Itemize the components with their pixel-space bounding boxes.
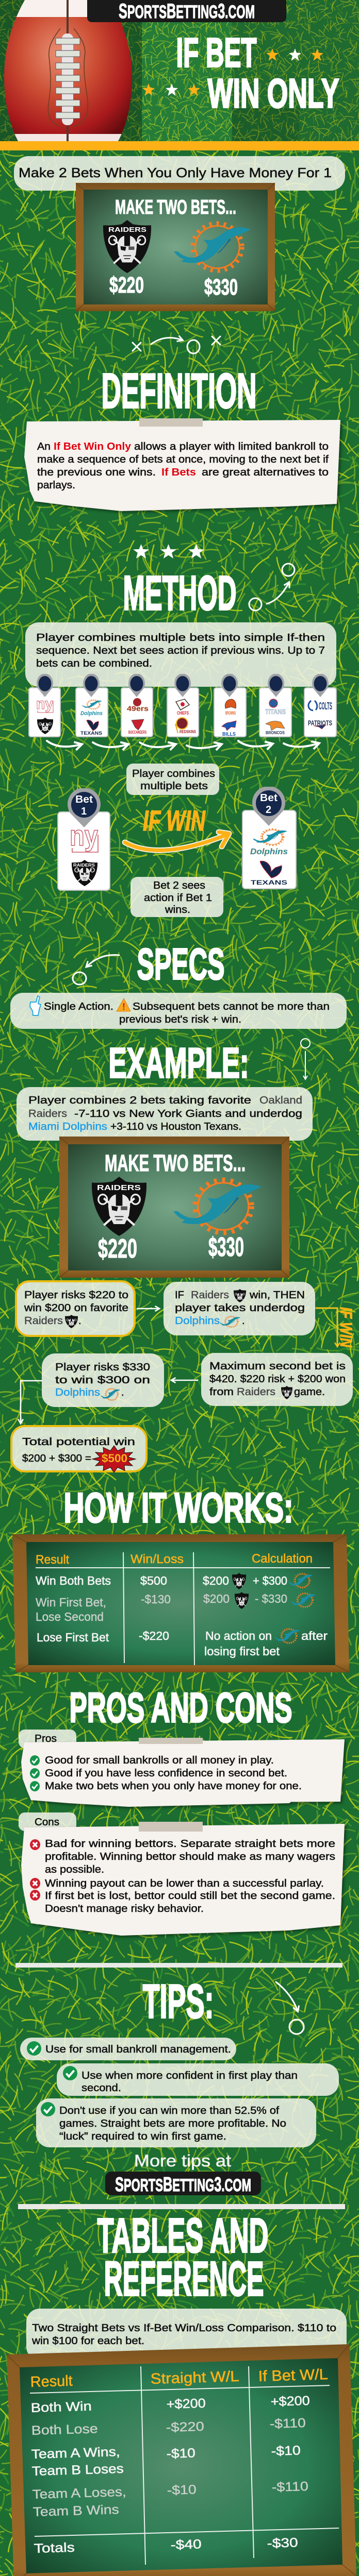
row: win first lose second: -$130 <box>141 1592 171 1606</box>
row: team a wins: Team B Loses <box>31 2462 124 2479</box>
card 5: browns bills: BROWNS <box>225 710 236 716</box>
row: both lose: -$220 <box>166 2419 204 2435</box>
row: both lose: -$110 <box>269 2416 306 2431</box>
callout: maximum second bet: from <box>209 1386 234 1398</box>
table header: Straight W/L <box>150 2368 239 2387</box>
callout: risks 330: . <box>121 1387 124 1398</box>
table header: Win/Loss <box>130 1552 184 1566</box>
icon: football <box>0 0 139 141</box>
cons list: Bad for winning bettors. Separate straight bets more <box>45 1838 335 1850</box>
row: totals: -$40 <box>170 2537 202 2552</box>
row: win first lose second: - $330 <box>255 1592 287 1605</box>
row: both lose <box>31 2416 306 2438</box>
panel: comparison table <box>7 2344 356 2576</box>
panel: bet 2 card: Bet <box>260 792 278 804</box>
panel: chalkboard make two bets <box>76 183 275 311</box>
row: both win <box>30 2394 310 2415</box>
panel: tip 3: games. Straight bets are more profitable. No <box>59 2118 286 2129</box>
definition text: An <box>37 441 51 452</box>
callout: total potential win: $200 + $300 = <box>22 1453 91 1464</box>
callout: risks 220 <box>16 1281 135 1336</box>
card 6: titans broncos <box>259 673 291 737</box>
icon: title stars <box>142 48 323 96</box>
amount: raiders: $220 <box>98 1234 137 1264</box>
panel: bet 2 card: Dolphins <box>250 848 288 856</box>
row: lose first bet: Lose First Bet <box>37 1631 109 1644</box>
callout: maximum second bet: $420. $220 risk + $200 won <box>209 1374 346 1385</box>
panel: bet 1 card: ny <box>70 819 98 852</box>
table header: Calculation <box>252 1552 313 1566</box>
cons list: Doesn't manage risky behavior. <box>45 1903 204 1914</box>
table header: If Bet W/L <box>258 2366 328 2385</box>
title: IF BET <box>176 30 257 75</box>
definition text: parlays. <box>37 480 75 491</box>
cons list: profitable. Winning bettor should make as many wagers <box>45 1851 335 1862</box>
panel: header <box>0 0 339 141</box>
panel: method description: Player combines multiple bets into simple If-then <box>36 632 325 643</box>
table header: Result <box>30 2373 73 2391</box>
panel: bet 2 card: 2 <box>266 804 271 816</box>
panel: comparison description: win $100 for each bet. <box>31 2335 144 2347</box>
card 4: chiefs redskins: CHIEFS <box>177 710 189 716</box>
panel: example description: Raiders <box>28 1108 67 1120</box>
panel: tip 1: Use for small bankroll management. <box>45 2044 231 2055</box>
arrow: if win <box>125 832 229 850</box>
panel: bet 1 card: Bet <box>75 794 93 805</box>
table header <box>36 1552 313 1567</box>
callout: risks 330: to win $300 on <box>55 1375 150 1386</box>
panel: bet 2 card: TEXANS <box>251 879 287 886</box>
panel: comparison description: Two Straight Bets vs If-Bet Win/Loss Comparison. $110 to <box>32 2323 336 2334</box>
panel: chalkboard example <box>59 1137 289 1278</box>
card 6: titans broncos: TITANS <box>265 707 286 716</box>
callout: bet 2 sees action <box>130 877 223 917</box>
panel: bet 1 card: RAIDERS <box>73 863 95 868</box>
definition text: are great alternatives to <box>202 467 329 478</box>
panel: bet 1 card: 1 <box>81 806 87 817</box>
callout: risks 330: Dolphins <box>55 1387 100 1398</box>
band: yellow divider <box>0 141 359 150</box>
panel: tip 3: Don't use if you can win more than 52.5% of <box>59 2105 279 2116</box>
icon: one finger hand <box>30 996 41 1015</box>
row: team a loses: Team B Wins <box>32 2502 119 2519</box>
arrows: between bet cards <box>47 741 318 748</box>
panel: specs rule: Subsequent bets cannot be more than <box>133 1001 330 1012</box>
panel: example description: -7-110 vs New York Giants and underdog <box>74 1108 302 1120</box>
panel: specs rule <box>10 993 347 1029</box>
row: win first lose second <box>36 1592 316 1623</box>
callout: maximum second bet: Maximum second bet is <box>209 1361 346 1372</box>
callout: risks 330 <box>42 1353 164 1407</box>
card 3: 49ers buccaneers: BUCCANEERS <box>128 730 146 735</box>
card 7: colts patriots: PATRIOTS <box>308 719 332 727</box>
row: both win: +$200 <box>270 2394 310 2409</box>
panel: tip 2 <box>57 2063 339 2096</box>
icon: play diagram specs <box>73 955 119 985</box>
row: team a loses: -$10 <box>167 2482 197 2498</box>
row: totals: -$30 <box>267 2535 298 2551</box>
card 3: 49ers buccaneers: 49ers <box>127 704 149 713</box>
definition text: If Bets <box>161 467 196 478</box>
panel: specs rule: Single Action. <box>44 1001 113 1012</box>
label: if win: IF WIN <box>143 804 206 837</box>
arrow: to total <box>21 1381 42 1423</box>
callout: if raiders win: player takes underdog <box>175 1302 305 1314</box>
tab: cons <box>19 1812 76 1831</box>
panel: pros: Pros <box>35 1733 57 1744</box>
panel: example description: Oakland <box>259 1095 302 1106</box>
callout: risks 220: Raiders <box>24 1315 63 1327</box>
icon: warning: ! <box>122 1002 125 1012</box>
cons list <box>30 1838 335 1914</box>
callout: if raiders win: Dolphins <box>175 1315 220 1327</box>
callout: if raiders win: Raiders <box>191 1290 229 1301</box>
pros list <box>30 1755 302 1792</box>
panel: tip 3 <box>36 2098 316 2147</box>
icon: dolphins logo <box>174 224 251 270</box>
callout: bet 2 sees action: action if Bet 1 <box>144 892 212 904</box>
row: win both bets <box>36 1573 313 1589</box>
title <box>176 30 339 116</box>
icon: play diagram method <box>249 564 295 611</box>
cons list: If first bet is lost, bettor could still bet the second game. <box>45 1890 335 1902</box>
card 5: browns bills <box>214 673 246 737</box>
card 3: 49ers buccaneers <box>121 673 153 737</box>
panel: example description: Player combines 2 bets taking favorite <box>28 1095 251 1106</box>
row: lose first bet <box>37 1629 328 1658</box>
row: totals: Totals <box>34 2540 75 2556</box>
row: team a wins: -$10 <box>271 2443 301 2459</box>
row: team a loses: Team A Loses, <box>32 2485 126 2502</box>
icon: play diagram definition <box>133 336 220 353</box>
callout: if raiders win <box>164 1282 315 1335</box>
row: win first lose second: Win First Bet, <box>36 1596 106 1609</box>
callout: maximum second bet: game. <box>294 1386 325 1398</box>
panel: method description: sequence. Next bet sees action if previous wins. Up to 7 <box>36 645 325 656</box>
row: lose first bet: after <box>301 1629 328 1642</box>
callout: if raiders win: win, THEN <box>249 1290 305 1301</box>
panel: example description: Miami Dolphins <box>28 1121 107 1132</box>
card 1: giants raiders: ny <box>36 696 53 713</box>
row: team a loses <box>32 2479 308 2519</box>
icon: play diagram tips <box>276 1982 304 2034</box>
panel: bet 1 card <box>58 788 110 890</box>
row: lose first bet: No action on <box>205 1629 272 1642</box>
row: lose first bet: -$220 <box>139 1629 169 1642</box>
panel: definition note <box>24 418 340 511</box>
card 4: chiefs redskins: REDSKINS <box>180 730 197 734</box>
row: win both bets: Win Both Bets <box>36 1574 111 1587</box>
row: win both bets: $500 <box>140 1574 167 1587</box>
row: win both bets: $200 <box>203 1574 229 1587</box>
cons list: Winning payout can be lower than a successful parlay. <box>45 1878 324 1889</box>
icon: dolphins logo <box>173 1180 262 1233</box>
row: win both bets: + $300 <box>253 1574 287 1587</box>
icon: raiders logo: RAIDERS <box>97 1183 141 1192</box>
amount: raiders: $220 <box>109 273 144 298</box>
card 4: chiefs redskins <box>167 673 199 737</box>
card 5: browns bills: BILLS <box>222 732 236 737</box>
icon: raiders logo <box>92 1177 146 1236</box>
subtitle pill <box>14 156 345 191</box>
panel: seven bet cards <box>29 673 336 737</box>
callout: total potential win: Total potential win <box>22 1436 135 1448</box>
card 7: colts patriots: COLTS <box>319 701 332 712</box>
tab: pros <box>19 1730 76 1748</box>
card 2: dolphins texans: Dolphins <box>80 710 103 717</box>
icon: warning <box>117 998 130 1012</box>
logo: footer banner: SPORTSBETTING3.COM <box>115 2174 251 2196</box>
panel: bet 2 card <box>242 786 296 889</box>
callout: if raiders win: IF <box>175 1290 184 1301</box>
heading: method: METHOD <box>123 566 236 620</box>
panel: specs rule: previous bet's risk + win. <box>119 1014 241 1025</box>
icon: method stars <box>133 544 204 558</box>
row: team a loses: -$110 <box>271 2479 308 2495</box>
callout: maximum second bet <box>201 1353 353 1406</box>
table header: Result <box>36 1553 69 1567</box>
icon: starburst 500: $500 <box>102 1452 127 1465</box>
icon: raiders logo: RAIDERS <box>108 226 146 233</box>
row: both lose: Both Lose <box>31 2421 98 2438</box>
callout: risks 330: Player risks $330 <box>55 1362 150 1373</box>
panel: example description <box>17 1087 313 1141</box>
cons list: as possible. <box>45 1864 104 1875</box>
heading: example: EXAMPLE: <box>108 1039 249 1087</box>
panel: comparison description <box>26 2309 347 2360</box>
panel: pros <box>19 1730 345 1807</box>
heading: tables and reference <box>97 2208 268 2306</box>
callout: bet 2 sees action: Bet 2 sees <box>153 880 205 891</box>
callout: risks 220: Player risks $220 to <box>24 1290 128 1301</box>
row: team a wins <box>31 2443 301 2479</box>
callout: risks 220: . <box>78 1315 81 1327</box>
table header <box>30 2366 328 2391</box>
callout: player combines: multiple bets <box>140 781 208 792</box>
heading: tips: TIPS: <box>142 1974 214 2028</box>
card 6: titans broncos: BRONCOS <box>266 731 285 735</box>
card 7: colts patriots <box>304 673 336 737</box>
icon: raiders logo <box>103 220 151 273</box>
definition text: If Bet Win Only <box>54 441 132 452</box>
callout: bet 2 sees action: wins. <box>165 904 190 916</box>
logo banner: SPORTSBETTING3.COM <box>119 0 255 23</box>
label: if win vertical: IF WIN <box>337 1307 355 1348</box>
card 1: giants raiders <box>29 673 60 737</box>
text: more tips: More tips at <box>134 2151 231 2170</box>
pros list: Good for small bankrolls or all money in play. <box>45 1755 274 1766</box>
amount: dolphins: $330 <box>204 275 238 300</box>
callout: player combines <box>126 764 219 795</box>
heading: specs: SPECS <box>137 940 225 989</box>
definition text: make a sequence of bets at once, moving to the next bet if <box>37 454 329 465</box>
row: win first lose second: $200 <box>203 1592 230 1605</box>
row: win first lose second: Lose Second <box>36 1610 104 1623</box>
panel: cons: Cons <box>35 1817 59 1828</box>
icon: starburst 500 <box>92 1446 136 1472</box>
row: both win: Both Win <box>30 2399 92 2415</box>
board heading: MAKE TWO BETS... <box>115 196 236 218</box>
pros list: Make two bets when you only have money for one. <box>45 1781 302 1792</box>
definition text: allows a player with limited bankroll to <box>134 441 329 452</box>
panel: cons <box>19 1812 345 1936</box>
callout: player combines: Player combines <box>132 768 215 779</box>
callout: if raiders win: . <box>242 1315 245 1327</box>
card 2: dolphins texans: TEXANS <box>80 731 102 736</box>
row: totals <box>34 2535 298 2556</box>
panel: tip 1 <box>20 2038 236 2060</box>
panel: method description <box>25 622 336 687</box>
amount: dolphins: $330 <box>208 1232 244 1262</box>
pros list: Good if you have less confidence in second bet. <box>45 1768 287 1779</box>
definition text <box>37 441 329 491</box>
row: team a wins: Team A Wins, <box>31 2445 120 2462</box>
arrow: to if raiders <box>137 1308 159 1309</box>
panel: example description: +3-110 vs Houston Texans. <box>110 1121 241 1132</box>
subtitle pill: Make 2 Bets When You Only Have Money For 1 <box>19 165 332 180</box>
row: lose first bet: losing first bet <box>204 1645 280 1658</box>
icon: play diagram example <box>301 1039 310 1079</box>
panel: tip 3: “luck” required to win first game. <box>59 2131 226 2142</box>
row: both win: +$200 <box>166 2396 206 2412</box>
callout: total potential win <box>11 1426 146 1472</box>
row: team a wins: -$10 <box>166 2446 195 2461</box>
callout: risks 220: win $200 on favorite <box>24 1302 128 1314</box>
panel: tip 2: second. <box>81 2082 121 2094</box>
panel: method description: bets can be combined. <box>36 658 152 669</box>
card 2: dolphins texans <box>76 673 108 737</box>
definition text: the previous one wins. <box>37 467 156 478</box>
arrow: to risks 330 <box>172 1380 198 1381</box>
callout: maximum second bet: Raiders <box>237 1386 275 1398</box>
panel: tip 2: Use when more confident in first play than <box>81 2070 298 2081</box>
panel: how it works table <box>12 1534 349 1672</box>
board heading: MAKE TWO BETS... <box>105 1150 246 1176</box>
arrow: if win yellow elbow <box>316 1308 340 1347</box>
